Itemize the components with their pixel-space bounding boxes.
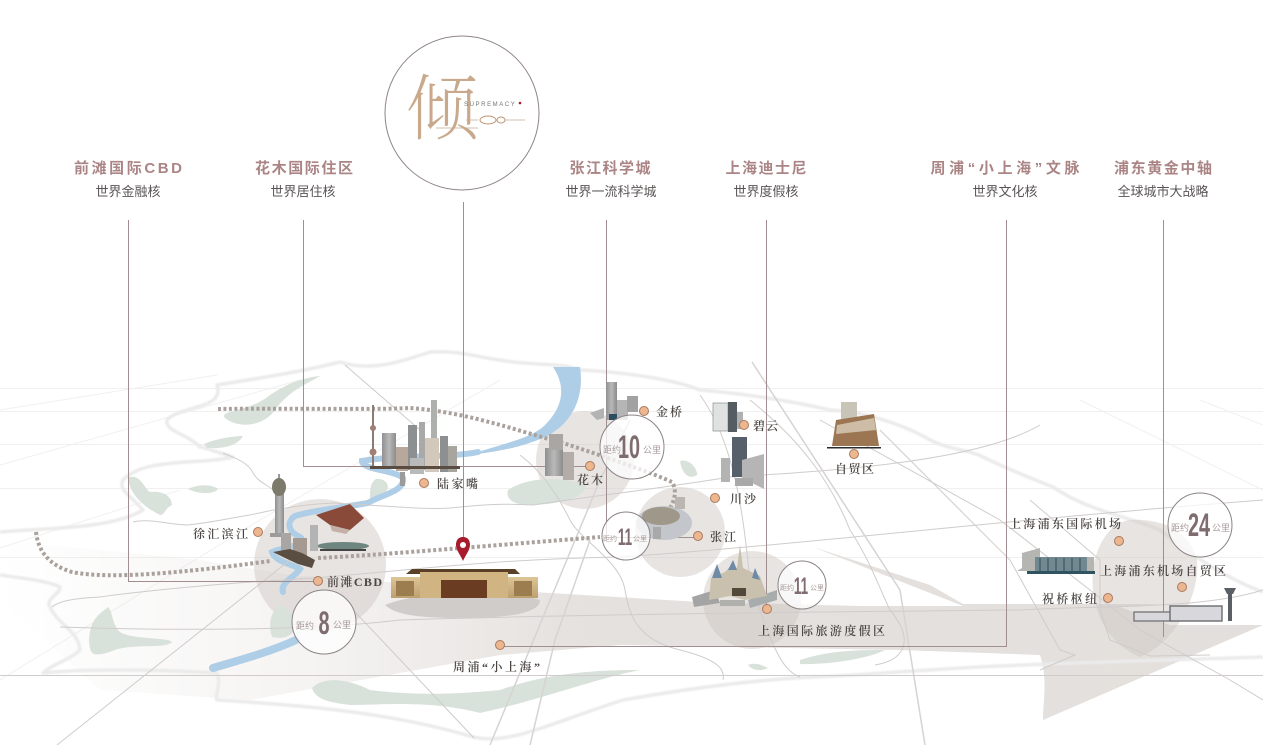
heading: 迪士尼 [726, 159, 806, 199]
heading: 张江: 张江科学城 [570, 159, 650, 177]
heading: 花木 [255, 159, 353, 199]
distance badge: 11 Zhangjiang: 距约 [603, 534, 617, 543]
icon: Disney castle [692, 545, 777, 608]
distance badge: 8: 8 [318, 605, 330, 641]
icon: Jinqiao towers [590, 382, 638, 420]
marker: 徐汇滨江: 徐汇滨江 [193, 526, 248, 541]
icon: Qiantan cluster [273, 525, 318, 568]
distance badge: 10: 公里 [643, 445, 661, 455]
distance badge: 11 Disney: 距约 [780, 583, 794, 592]
distance badge: 10 [600, 415, 664, 479]
marker: 祝桥枢纽: 祝桥枢纽 [1042, 591, 1097, 606]
distance badge: 10: 距约 [603, 444, 621, 455]
marker: 上海浦东机场自贸区: 上海浦东机场自贸区 [1100, 563, 1226, 578]
heading: 周浦 [930, 159, 1080, 199]
pale location halos [254, 411, 1197, 657]
icon: Chuansha towers [721, 437, 764, 489]
logo wordmark: SUPREMACY [464, 102, 516, 108]
marker: 川沙: 川沙 [730, 491, 757, 506]
distance badge: 10: 10 [618, 429, 640, 465]
logo badge [385, 36, 539, 190]
distance badge: 24: 公里 [1212, 523, 1230, 533]
marker: 花木: 花木 [577, 472, 603, 487]
icon: Expo disc [317, 542, 369, 551]
marker: 周浦小上海: 周浦“小上海” [453, 659, 540, 674]
logo character: 倾 [406, 70, 479, 150]
heading: 周浦: 周浦“小上海”文脉 [930, 159, 1080, 177]
heading: 花木: 世界居住核 [270, 184, 336, 199]
heading: 前滩: 前滩国际CBD [74, 159, 182, 177]
icon: Huamu towers [545, 434, 574, 480]
marker: 上海国际旅游度假区: 上海国际旅游度假区 [758, 623, 885, 638]
marker: 碧云 [740, 418, 779, 433]
distance badge: 24: 距约 [1171, 522, 1189, 533]
heading: 浦东 [1114, 159, 1212, 199]
marker: 川沙 [710, 491, 757, 506]
distance badge: 11 Disney: 公里 [810, 584, 824, 592]
distance badge: 11 Zhangjiang: 公里 [633, 535, 647, 543]
marker: 周浦小上海 [453, 640, 540, 674]
marker: 花木 [577, 462, 603, 487]
icon: cargo terminal and control tower [1134, 588, 1236, 621]
heading: 前滩: 世界金融核 [95, 184, 161, 199]
icon: Pudong airport terminal [1017, 548, 1095, 574]
marker: 碧云: 碧云 [753, 418, 779, 433]
icon: Biyun towers [713, 402, 743, 432]
distance badge: 11 Zhangjiang: 11 [618, 524, 632, 551]
distance badge: 8: 距约 [296, 620, 314, 631]
distance badge: 24: 24 [1188, 507, 1210, 543]
distance badge: 24 [1168, 493, 1232, 557]
marker: 前滩CBD: 前滩CBD [327, 574, 382, 589]
distance badge: 11 Disney [778, 561, 826, 609]
marker: 金桥: 金桥 [656, 404, 682, 419]
marker: 陆家嘴: 陆家嘴 [437, 476, 478, 491]
heading: 周浦: 世界文化核 [972, 184, 1038, 199]
marker: 张江: 张江 [710, 530, 736, 544]
marker: 上海国际旅游度假区 [758, 604, 885, 638]
marker: 上海浦东国际机场 [1009, 516, 1124, 546]
marker: 自贸区 [835, 450, 874, 476]
road network [0, 362, 1263, 745]
heading: 前滩 [74, 159, 182, 199]
marker: 上海浦东国际机场: 上海浦东国际机场 [1009, 516, 1121, 531]
distance badge: 11 Zhangjiang [602, 512, 650, 560]
marker: 自贸区: 自贸区 [835, 461, 874, 476]
heading: 迪士尼: 世界度假核 [733, 184, 799, 199]
icon: free trade zone landmark [827, 402, 881, 448]
rivers [213, 367, 581, 668]
heading: 花木: 花木国际住区 [255, 159, 353, 177]
icon: Expo pavilion [316, 504, 364, 534]
distance badge: 11 Disney: 11 [794, 573, 808, 600]
marker: 陆家嘴 [420, 476, 478, 491]
heading: 张江: 世界一流科学城 [565, 184, 657, 199]
map outline coast [0, 352, 1263, 592]
heading: 张江 [565, 159, 657, 199]
central corridor band with arrow head [0, 540, 1263, 720]
icon: Lujiazui skyline [370, 400, 460, 486]
marker: 金桥 [640, 404, 682, 419]
distance badge: 8 [292, 590, 356, 654]
dotted corridor lines [36, 408, 675, 575]
heading: 迪士尼: 上海迪士尼 [726, 159, 806, 177]
background grid lines [0, 375, 1263, 680]
icon: Xuhui tower [270, 474, 286, 537]
green parks [89, 376, 885, 713]
icon: project clubhouse [385, 569, 540, 618]
red location pin [456, 537, 470, 561]
marker: 上海浦东机场自贸区 [1100, 563, 1226, 592]
distance badge: 8: 公里 [333, 620, 351, 630]
marker: 张江 [694, 530, 736, 544]
icon: Zhangjiang ring [636, 497, 692, 540]
heading: 浦东: 全球城市大战略 [1117, 184, 1209, 199]
leader lines [128, 202, 1164, 646]
heading: 浦东: 浦东黄金中轴 [1114, 159, 1212, 177]
